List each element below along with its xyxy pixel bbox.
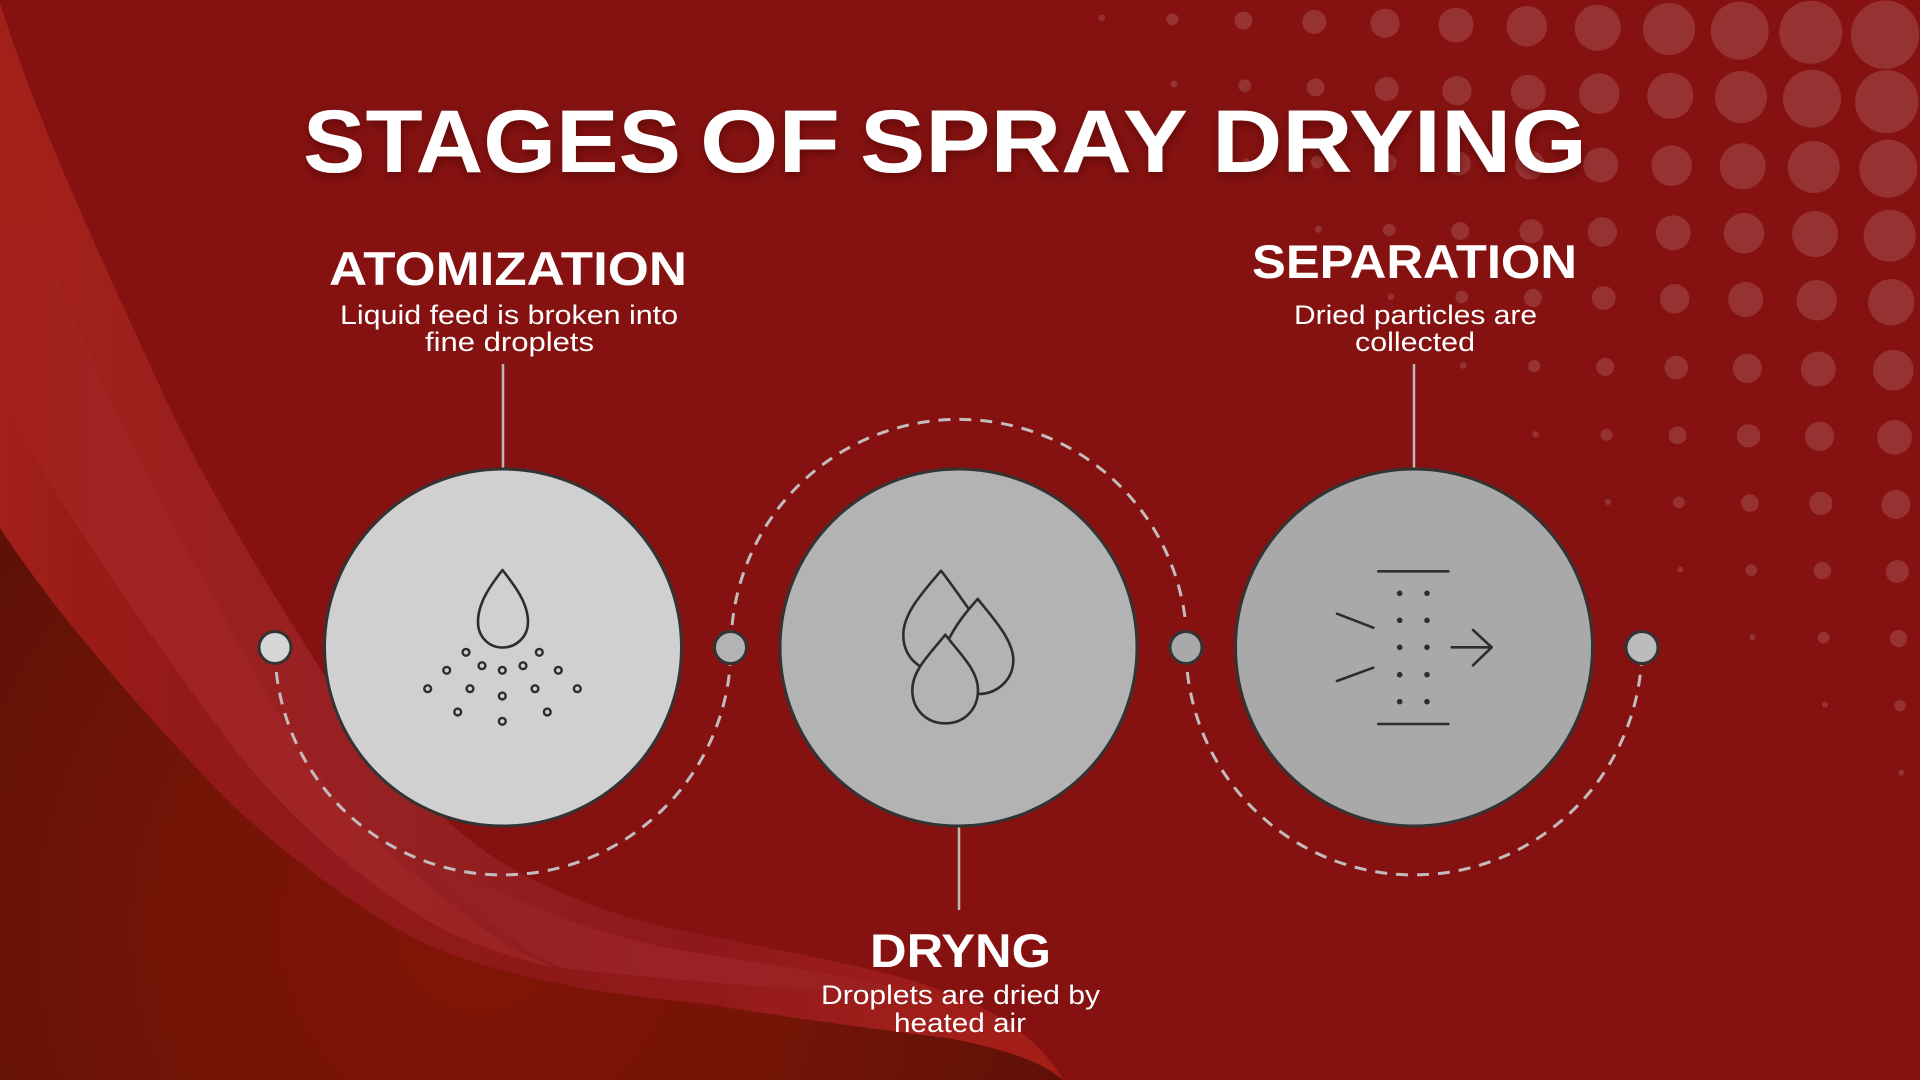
swoosh: lower ribbon: [0, 395, 1063, 1080]
text: separation description: Dried particles are: [1294, 300, 1537, 330]
halftone dot pattern: [1098, 0, 1919, 776]
text: atomization description: Liquid feed is broken into: [340, 300, 678, 330]
title: OF: [700, 91, 840, 191]
icon: three droplets: [903, 571, 1013, 723]
icon: droplet breaking into spray: [424, 570, 581, 725]
text: separation description: [1294, 300, 1537, 357]
swoosh: bright ribbon: [0, 227, 555, 968]
connector line: separation: [1413, 364, 1415, 470]
title: [303, 91, 1587, 191]
node 3: [1170, 632, 1202, 664]
dashed arc: lower right: [1187, 665, 1641, 875]
circle: drying: [780, 469, 1137, 826]
title: STAGES: [303, 91, 681, 191]
text: atomization description: [340, 300, 678, 357]
dashed arc: lower left: [276, 665, 730, 875]
node 1: [259, 632, 291, 664]
circle: atomization: [324, 469, 682, 826]
text: drying description: [821, 980, 1101, 1038]
swoosh: outer ribbon: [0, 3, 1063, 1080]
dashed arc: upper middle: [732, 419, 1186, 625]
heading: atomization: ATOMIZATION: [329, 242, 687, 295]
connector line: atomization: [502, 364, 504, 470]
node 4: [1626, 632, 1658, 664]
swoosh: crossing ribbon: [420, 858, 950, 1012]
text: drying description: heated air: [894, 1008, 1026, 1038]
title: SPRAY: [860, 91, 1188, 191]
text: drying description: Droplets are dried by: [821, 980, 1101, 1010]
text: atomization description: fine droplets: [425, 327, 594, 357]
node 2: [714, 632, 746, 664]
text: separation description: collected: [1355, 327, 1475, 357]
heading: separation: SEPARATION: [1252, 235, 1577, 288]
swoosh: dark corner: [0, 528, 1063, 1080]
circle: separation: [1236, 469, 1592, 826]
heading: drying: DRYNG: [870, 924, 1051, 977]
connector line: drying: [958, 825, 960, 910]
icon: particle separator with arrow: [1337, 571, 1492, 724]
title: DRYING: [1212, 91, 1587, 191]
